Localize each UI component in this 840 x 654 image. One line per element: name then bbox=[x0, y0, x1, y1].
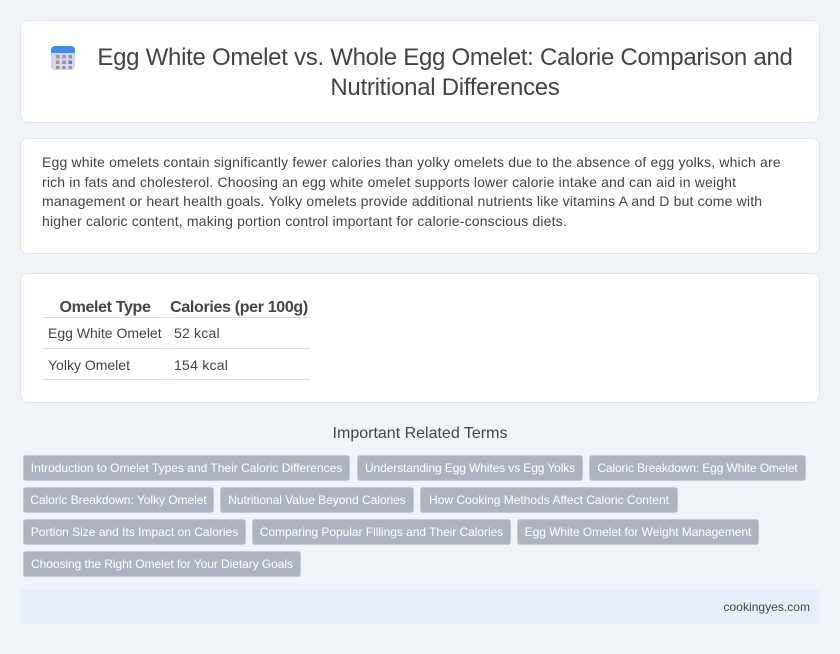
tag: Understanding Egg Whites vs Egg Yolks bbox=[365, 461, 575, 475]
tag: Nutritional Value Beyond Calories bbox=[228, 493, 406, 507]
tag: Caloric Breakdown: Yolky Omelet bbox=[30, 493, 207, 507]
table header: omelet type: Omelet Type bbox=[60, 299, 150, 316]
title bbox=[97, 44, 793, 101]
tag bbox=[589, 455, 806, 481]
title: Nutritional Differences bbox=[330, 74, 560, 101]
tag: Egg White Omelet for Weight Management bbox=[525, 525, 751, 539]
tag bbox=[420, 487, 678, 513]
table: omelet calories bbox=[43, 299, 310, 380]
tag bbox=[220, 487, 414, 513]
table cell: 52 kcal: 52 kcal bbox=[174, 325, 220, 341]
icon: calendar bbox=[51, 46, 75, 70]
tag: How Cooking Methods Affect Caloric Content bbox=[429, 493, 669, 507]
panel: header bbox=[20, 20, 820, 123]
tag bbox=[23, 487, 214, 513]
table cell: yolky omelet: Yolky Omelet bbox=[48, 357, 130, 373]
text block: summary: rich in fats and cholesterol. Choosing an egg white omelet supports lower calorie intake and can aid in weight bbox=[42, 174, 736, 190]
panel: description bbox=[20, 138, 820, 254]
tag bbox=[23, 551, 301, 577]
tag: Comparing Popular Fillings and Their Calories bbox=[260, 525, 503, 539]
table header: calories: Calories (per 100g) bbox=[170, 299, 308, 316]
tag: Introduction to Omelet Types and Their Caloric Differences bbox=[31, 461, 342, 475]
tag bbox=[252, 519, 511, 545]
tag group: related terms bbox=[23, 455, 806, 577]
text block: summary: management or heart health goals. Yolky omelets provide additional nutrients like vitamins A and D but come with bbox=[42, 193, 762, 209]
tag: Caloric Breakdown: Egg White Omelet bbox=[597, 461, 798, 475]
footer source: cookingyes.com bbox=[724, 600, 810, 614]
footer bar bbox=[20, 590, 820, 624]
text block: summary: higher caloric content, making portion control important for calorie-conscious diets. bbox=[42, 213, 567, 229]
table cell: egg white omelet: Egg White Omelet bbox=[48, 325, 162, 341]
tag: Choosing the Right Omelet for Your Dietary Goals bbox=[31, 557, 293, 571]
tag bbox=[23, 455, 350, 481]
panel: calorie table bbox=[20, 273, 820, 403]
tag bbox=[23, 519, 246, 545]
heading: related terms: Important Related Terms bbox=[333, 425, 507, 442]
tag bbox=[357, 455, 583, 481]
tag: Portion Size and Its Impact on Calories bbox=[31, 525, 238, 539]
text block: summary: Egg white omelets contain significantly fewer calories than yolky omelets due to the absence of egg yolks, which are bbox=[42, 154, 781, 170]
tag bbox=[517, 519, 759, 545]
title: Egg White Omelet vs. Whole Egg Omelet: Calorie Comparison and bbox=[97, 44, 793, 71]
table cell: 154 kcal: 154 kcal bbox=[174, 357, 228, 373]
text block: summary bbox=[42, 154, 781, 229]
